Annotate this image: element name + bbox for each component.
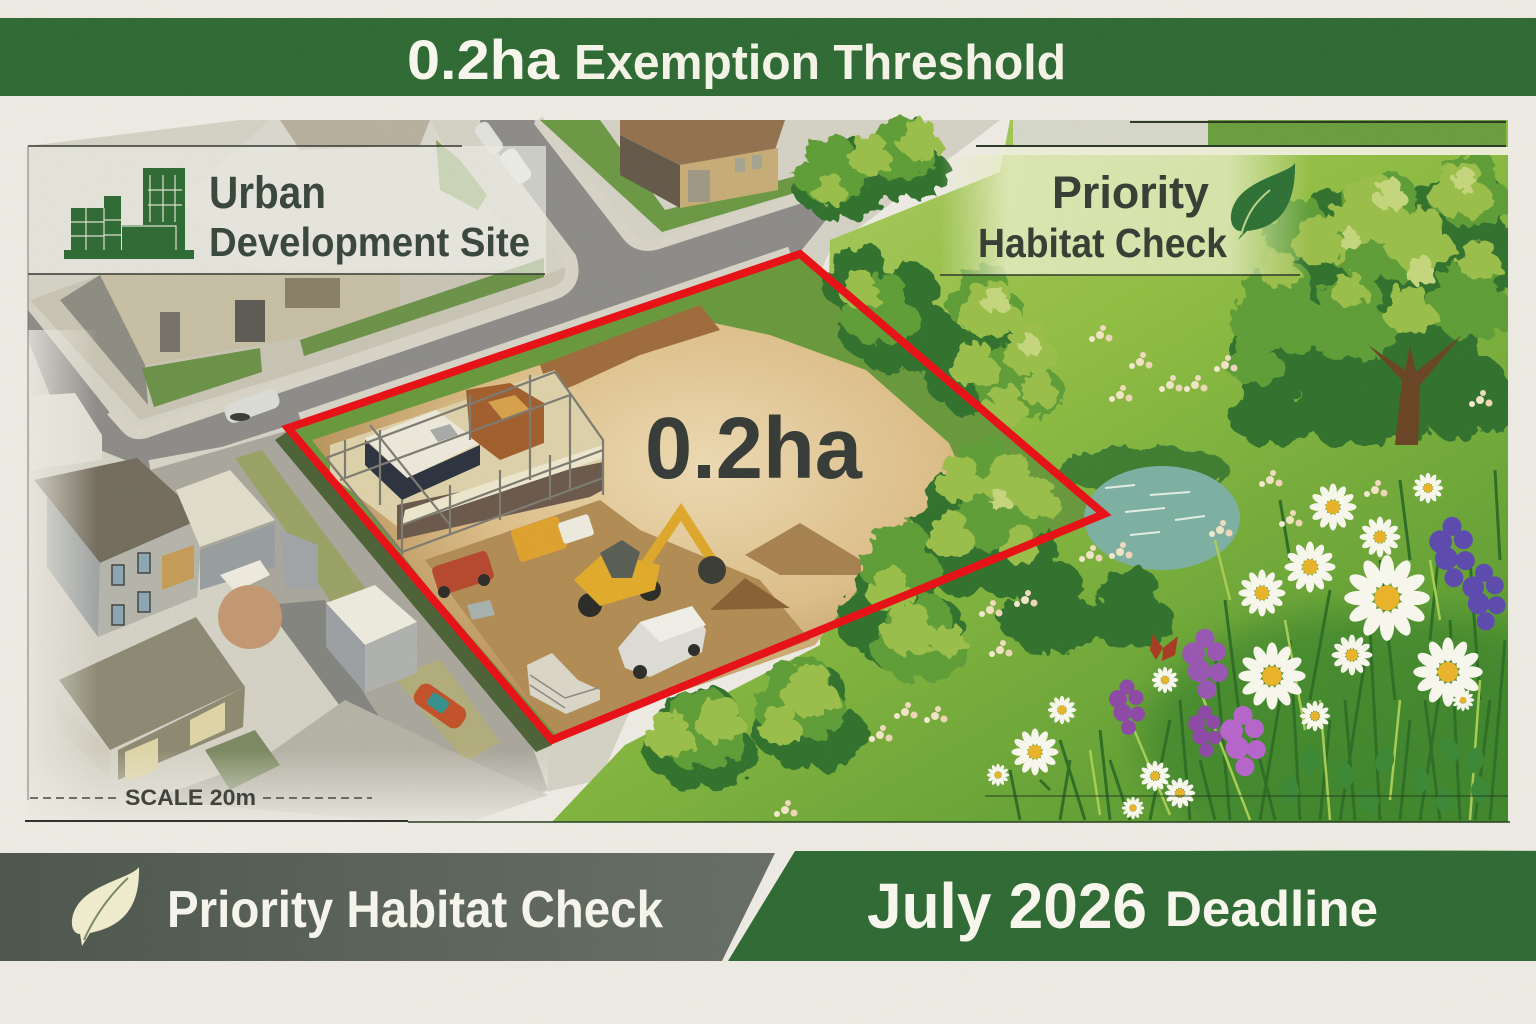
urban district	[28, 119, 1000, 822]
icon: green leaf	[1231, 163, 1295, 240]
bare earth	[312, 320, 965, 735]
pale meadow flowers	[774, 325, 1492, 817]
icon: cream leaf	[72, 867, 139, 946]
panel: urban development label	[28, 146, 546, 800]
site vehicles	[431, 514, 706, 679]
main illustration	[0, 117, 1536, 870]
dark undergrowth	[642, 118, 1534, 790]
panel: july 2026 deadline footer	[728, 851, 1536, 961]
top right hedge strip	[976, 120, 1508, 155]
foliage	[642, 117, 1534, 790]
construction site	[288, 254, 1104, 740]
house top centre	[540, 120, 805, 232]
soil mounds	[745, 523, 861, 575]
scaffolded building	[326, 370, 603, 555]
road network	[28, 120, 830, 470]
darker soil	[425, 500, 810, 735]
deadline text	[867, 870, 1378, 942]
panel: priority habitat check footer	[0, 853, 775, 961]
site label: 0.2ha	[645, 400, 863, 497]
daisies	[987, 473, 1483, 819]
grass margin	[288, 254, 1104, 740]
tree trunk	[1368, 335, 1462, 445]
orange car	[410, 680, 470, 732]
label text: Habitat Check	[978, 220, 1227, 266]
label text: Urban	[209, 167, 326, 218]
scale bar: SCALE 20m	[125, 785, 256, 810]
deadline text: Deadline	[1165, 881, 1378, 937]
side road and drive	[150, 430, 552, 822]
pale leaves	[981, 168, 1478, 510]
brick core	[466, 383, 544, 460]
footer text: Priority Habitat Check	[167, 881, 663, 939]
lower meadow grass	[1010, 470, 1505, 820]
houses lower left	[30, 393, 417, 790]
label text	[978, 167, 1227, 266]
upper block and buildings	[30, 120, 570, 420]
icon: butterfly	[1150, 634, 1178, 661]
paper fade on urban corner	[28, 330, 548, 822]
pavements	[112, 120, 800, 468]
red site boundary	[288, 254, 1104, 740]
label text: Development Site	[209, 219, 530, 265]
label text	[209, 167, 530, 265]
hedges	[142, 258, 544, 407]
title: 0.2ha	[407, 28, 560, 91]
pond	[1060, 446, 1240, 570]
icon: city buildings	[64, 168, 194, 259]
purple wildflowers	[1109, 517, 1506, 776]
title	[407, 28, 1066, 91]
meadow	[552, 120, 1508, 822]
label text: Priority	[1052, 167, 1209, 218]
lime leaves	[644, 119, 1502, 757]
pallets of materials	[527, 653, 600, 714]
foreground meadow shade	[1140, 610, 1536, 870]
white building block	[365, 410, 480, 500]
title: Exemption Threshold	[574, 36, 1066, 90]
paper borders around picture	[0, 118, 1536, 850]
parked cars	[222, 119, 534, 425]
bottom right round leaves	[1281, 734, 1489, 814]
bottom picture rules	[408, 796, 1510, 822]
panel: priority habitat label	[940, 155, 1310, 275]
deadline text: July 2026	[867, 870, 1147, 942]
top title banner	[0, 18, 1536, 96]
excavated bank	[540, 305, 720, 395]
mid green leaves	[655, 117, 1515, 769]
excavator	[574, 512, 726, 617]
